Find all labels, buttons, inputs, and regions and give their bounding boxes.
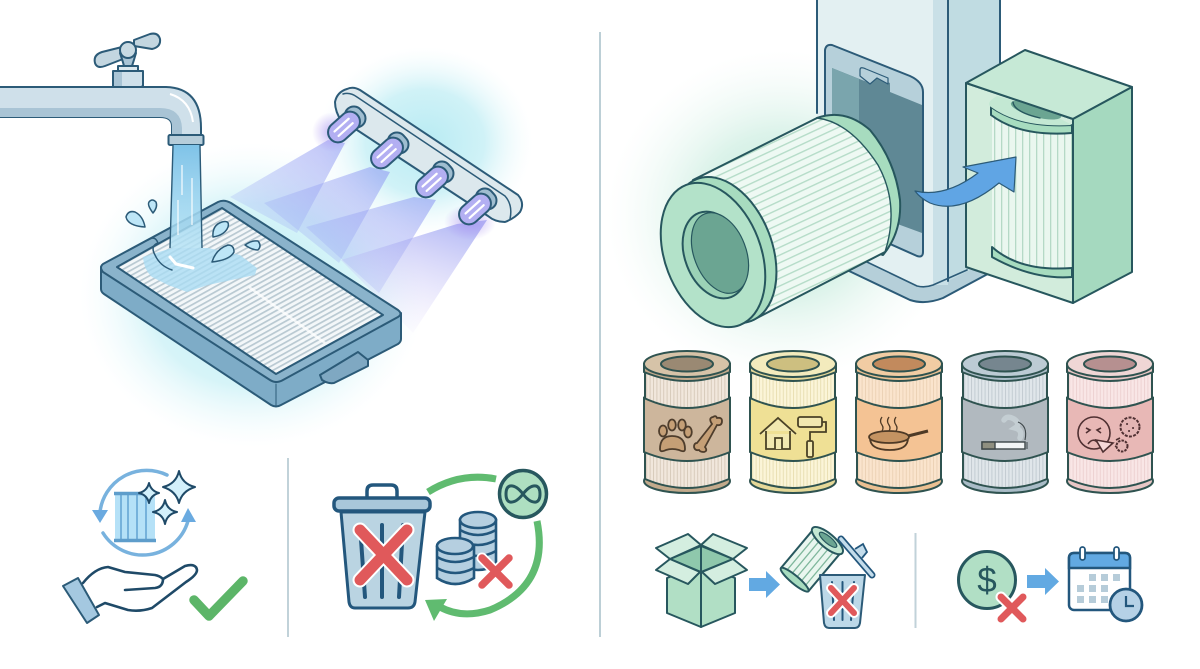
coin stacks bbox=[437, 512, 509, 585]
icon: paw and bone bbox=[659, 416, 722, 452]
open filter slot bbox=[825, 45, 923, 256]
cylinder front ring bbox=[652, 162, 796, 338]
lamp 3 bbox=[411, 158, 457, 202]
check mark bbox=[194, 581, 243, 616]
UV beams bbox=[230, 112, 496, 333]
divider: bottom left bbox=[287, 458, 289, 637]
small trash can with lid bbox=[820, 539, 872, 628]
UV lamp bar bbox=[323, 88, 522, 229]
canister: smoke bbox=[962, 351, 1048, 493]
icon: house and paint roller bbox=[760, 417, 826, 457]
big cylinder filter bbox=[641, 115, 900, 342]
illustration: faucet washing filter under UV lamps bbox=[0, 34, 533, 447]
faucet pipe bbox=[0, 87, 201, 136]
calendar with clock bbox=[1069, 547, 1142, 621]
lamp 2 bbox=[366, 129, 412, 173]
icon: no cost to scheduled replacement bbox=[958, 547, 1142, 621]
water droplets bbox=[126, 200, 260, 270]
blue arrow bbox=[1027, 568, 1059, 595]
lamp 1 bbox=[323, 103, 369, 147]
canister: home renovation bbox=[750, 351, 836, 493]
icon: cigarette with smoke bbox=[982, 417, 1027, 449]
icon: open box to discarded filter bbox=[656, 523, 872, 628]
dollar sign: $ bbox=[977, 561, 997, 600]
glow around tray bbox=[80, 143, 424, 447]
water stream bbox=[170, 145, 202, 248]
discarded filter bbox=[777, 523, 847, 595]
mini filter bbox=[114, 493, 156, 540]
divider: center bbox=[599, 32, 601, 637]
filter in box bbox=[989, 96, 1072, 277]
canister: allergens bbox=[1067, 351, 1153, 493]
replacement box with filter bbox=[966, 50, 1132, 303]
glow around UV bar bbox=[317, 47, 533, 237]
blue arrow bbox=[749, 571, 780, 598]
icon: no trash, no cost, infinite reuse bbox=[334, 470, 546, 621]
filter tray bbox=[101, 201, 401, 406]
green loop arrows bbox=[428, 477, 539, 614]
illustration: replacement filter and air purifier bbox=[607, 0, 1132, 380]
faucet handle bbox=[95, 34, 160, 90]
infinity badge bbox=[500, 470, 546, 518]
purifier tower bbox=[817, 0, 1000, 287]
canister: pets bbox=[644, 351, 730, 493]
icon: sneezing face with germs bbox=[1078, 417, 1140, 452]
dollar coin bbox=[958, 552, 1023, 619]
open box bbox=[656, 534, 747, 627]
water puddle bbox=[143, 248, 257, 292]
icon: frying pan bbox=[869, 417, 928, 450]
tray pull tab bbox=[320, 352, 368, 383]
faucet collar bbox=[168, 135, 204, 145]
row of specialty filter canisters bbox=[644, 351, 1153, 493]
trash can bbox=[334, 485, 430, 608]
green glow bbox=[607, 50, 957, 380]
purifier base bbox=[847, 250, 1010, 302]
divider: bottom right bbox=[914, 533, 916, 628]
blue arrow into box bbox=[915, 157, 1016, 206]
lamp 4 bbox=[454, 185, 500, 229]
canister: cooking bbox=[856, 351, 942, 493]
faucet bbox=[0, 34, 204, 248]
sparkles bbox=[139, 471, 195, 524]
cycle arrows bbox=[100, 470, 188, 555]
open hand bbox=[63, 565, 197, 623]
icon: hand holding reusable filter bbox=[63, 470, 243, 623]
